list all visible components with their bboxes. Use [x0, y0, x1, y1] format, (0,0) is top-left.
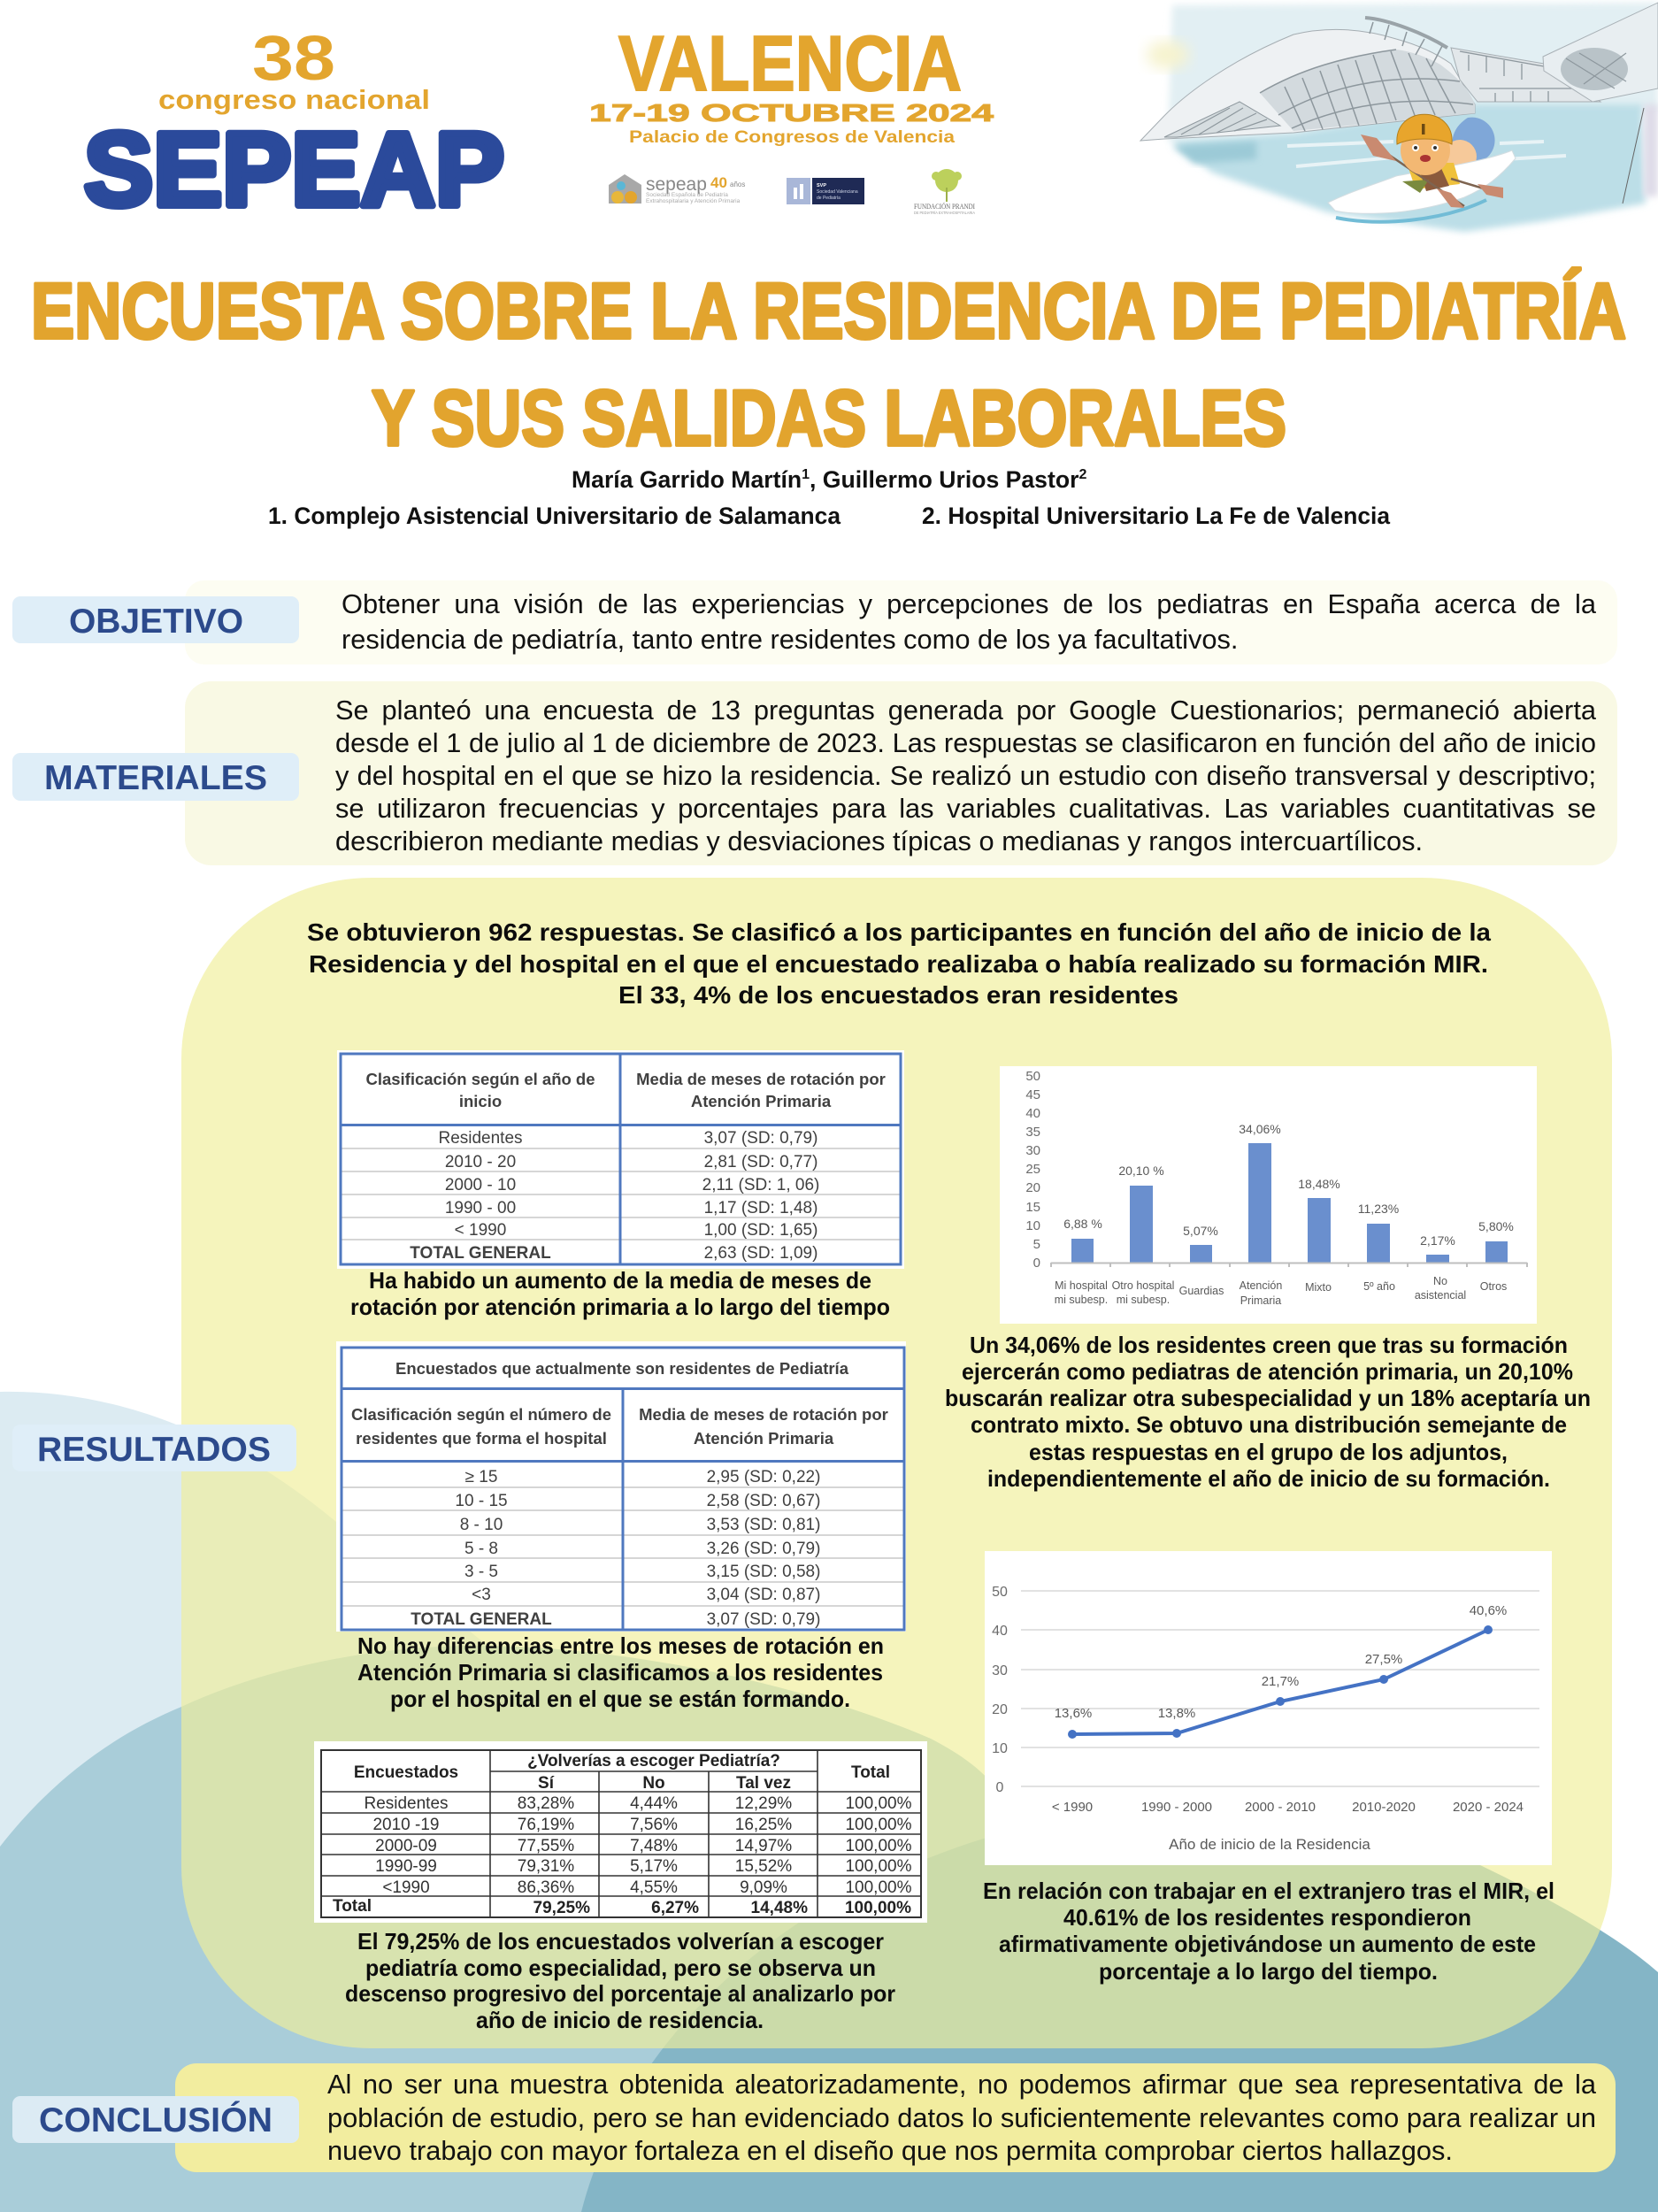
caption: bar chart: buscarán realizar otra subespecialidad y un 18% aceptaría un: [945, 1385, 1591, 1411]
caption: table 3: pediatría como especialidad, pero se observa un: [365, 1955, 876, 1981]
line chart: working abroad by start year: 2000 - 2010: [1245, 1800, 1316, 1815]
table: would choose pediatrics again: 100,00%: [845, 1857, 912, 1876]
table: would choose pediatrics again: 76,19%: [518, 1816, 574, 1834]
bar chart: career plans after residency: 10: [1025, 1218, 1040, 1233]
line chart: working abroad by start year: 40: [992, 1624, 1008, 1639]
heading: objetivo: OBJETIVO: [69, 603, 243, 641]
text: summary of responses: Se obtuvieron 962 respuestas. Se clasificó a los participantes en función del año de inicio de la: [307, 918, 1492, 946]
bar chart: career plans after residency: 18,48%: [1298, 1177, 1340, 1191]
heading: objetivo: [12, 596, 299, 643]
text: materiales: Se planteó una encuesta de 13 preguntas generada por Google Cuestionarios; permaneció abierta: [335, 695, 1596, 726]
heading: materiales: [12, 753, 299, 801]
caption: line chart: porcentaje a lo largo del tiempo.: [1099, 1958, 1438, 1985]
text: objetivo: residencia de pediatría, tanto entre residentes como de los ya facultativos.: [342, 624, 1238, 655]
affiliations: [268, 503, 1390, 529]
caption: bar chart: Un 34,06% de los residentes creen que tras su formación: [970, 1332, 1568, 1358]
caption: line chart: [983, 1878, 1554, 1985]
bar chart: career plans after residency: asistencial: [1415, 1289, 1466, 1302]
line chart: working abroad by start year: 10: [992, 1741, 1008, 1756]
table: would choose pediatrics again: 77,55%: [518, 1837, 574, 1855]
table: would choose pediatrics again: 5,17%: [630, 1857, 678, 1876]
table: rotation months by start year: 1,17 (SD: 1,48): [704, 1199, 817, 1217]
caption: table 3: descenso progresivo del porcentaje al analizarlo por: [345, 1980, 895, 2007]
line chart: working abroad by start year: 13,8%: [1158, 1706, 1195, 1721]
table: rotation months by start year: TOTAL GENERAL: [410, 1244, 551, 1263]
table: would choose pediatrics again: Total: [851, 1763, 890, 1782]
table: rotation months by hospital size: 3 - 5: [464, 1563, 498, 1581]
bar chart: career plans after residency: Otros: [1480, 1280, 1507, 1293]
caption: table 3: [345, 1928, 895, 2033]
text: conclusión: Al no ser una muestra obtenida aleatorizadamente, no podemos afirmar que sea representativa de la: [327, 2069, 1596, 2100]
caption: bar chart: contrato mixto. Se obtuvo una distribución semejante de: [971, 1411, 1567, 1438]
text: materiales: y del hospital en el que se hizo la residencia. Se realizó un estudio con diseño transversal y descriptivo;: [335, 760, 1596, 791]
background: layered blue waves: [0, 1392, 1658, 2212]
caption: table 1: rotación por atención primaria a lo largo del tiempo: [350, 1294, 890, 1320]
table: rotation months by start year: < 1990: [455, 1221, 506, 1240]
authors: María Garrido Martín: [572, 466, 802, 493]
heading: conclusión: CONCLUSIÓN: [39, 2101, 272, 2139]
table: would choose pediatrics again: 14,48%: [751, 1899, 808, 1917]
text: summary of responses: El 33, 4% de los encuestados eran residentes: [618, 981, 1178, 1009]
line chart: working abroad by start year: 40,6%: [1470, 1603, 1507, 1618]
bar chart: career plans after residency: 50: [1025, 1069, 1040, 1084]
table: rotation months by hospital size: TOTAL GENERAL: [411, 1610, 552, 1629]
panel: resultados: [12, 878, 1612, 2048]
line chart: working abroad by start year: 13,6%: [1055, 1706, 1092, 1721]
logo: SVP: Sociedad Valenciana: [817, 189, 858, 195]
line chart: working abroad by start year: 2020 - 2024: [1453, 1800, 1524, 1815]
table: rotation months by start year: Atención Primaria: [691, 1092, 832, 1110]
text: objetivo: [342, 587, 1596, 659]
table: would choose pediatrics again: Sí: [538, 1774, 555, 1793]
affiliations: 1. Complejo Asistencial Universitario de Salamanca: [268, 503, 841, 529]
table: would choose pediatrics again: 100,00%: [845, 1899, 911, 1917]
text: summary of responses: [307, 918, 1492, 1009]
table: rotation months by start year: 1990 - 00: [445, 1199, 516, 1217]
line chart: working abroad by start year: 30: [992, 1663, 1008, 1678]
bar chart: career plans after residency: 20,10 %: [1118, 1164, 1164, 1178]
line chart: working abroad by start year: 27,5%: [1365, 1652, 1402, 1667]
authors: 2: [1078, 467, 1086, 482]
table: rotation months by start year: Media de meses de rotación por: [636, 1070, 886, 1088]
table: rotation months by start year: 3,07 (SD: 0,79): [704, 1129, 817, 1148]
caption: table 2: [357, 1632, 884, 1712]
table: would choose pediatrics again: 6,27%: [651, 1899, 699, 1917]
table: would choose pediatrics again: [314, 1741, 927, 1923]
bar chart: career plans after residency: Primaria: [1240, 1294, 1281, 1307]
table: rotation months by start year: 1,00 (SD: 1,65): [704, 1221, 817, 1240]
table: would choose pediatrics again: ¿Volverías a escoger Pediatría?: [527, 1752, 780, 1770]
caption: table 2: por el hospital en el que se están formando.: [390, 1686, 850, 1712]
line chart: working abroad by start year: 1990 - 2000: [1141, 1800, 1212, 1815]
table: would choose pediatrics again: 79,31%: [518, 1857, 574, 1876]
table: would choose pediatrics again: Total: [333, 1897, 372, 1916]
line chart: working abroad by start year: 0: [996, 1780, 1004, 1795]
table: rotation months by hospital size: <3: [472, 1586, 491, 1604]
line chart: working abroad by start year: 20: [992, 1702, 1008, 1717]
illustration: kayak kids in front of Ciudad de las Artes: [1140, 3, 1658, 232]
table: rotation months by start year: 2,81 (SD: 0,77): [704, 1153, 817, 1171]
bar chart: career plans after residency: 2,17%: [1420, 1233, 1455, 1248]
caption: bar chart: [945, 1332, 1591, 1492]
bar chart: career plans after residency: 6,88 %: [1063, 1217, 1102, 1231]
table: rotation months by start year: [337, 1050, 904, 1269]
logo: sepeap 40 años: sepeap: [646, 174, 707, 195]
table: rotation months by start year: inicio: [459, 1092, 502, 1110]
logo: 38 congreso nacional SEPEAP: 38: [252, 24, 335, 94]
table: rotation months by hospital size: 3,07 (SD: 0,79): [707, 1610, 820, 1629]
table: would choose pediatrics again: 4,55%: [630, 1878, 678, 1897]
text: conclusión: nuevo trabajo con mayor fortaleza en el diseño que nos permita comprobar ciertos hallazgos.: [327, 2135, 1453, 2166]
bar chart: career plans after residency: Mixto: [1305, 1281, 1332, 1294]
bar chart: career plans after residency: Mi hospital: [1055, 1279, 1108, 1292]
table: would choose pediatrics again: Tal vez: [736, 1774, 791, 1793]
table: would choose pediatrics again: 2000-09: [375, 1837, 437, 1855]
authors: 1: [802, 467, 810, 482]
table: rotation months by hospital size: Clasificación según el número de: [351, 1405, 611, 1424]
logo: sepeap 40 años: Sociedad Española de Pediatría: [646, 192, 728, 198]
bar chart: career plans after residency: mi subesp.: [1117, 1294, 1170, 1306]
table: rotation months by start year: Residentes: [438, 1129, 523, 1148]
table: would choose pediatrics again: 7,48%: [630, 1837, 678, 1855]
logo: SVP: de Pediatría: [817, 196, 841, 201]
table: rotation months by start year: Clasificación según el año de: [365, 1070, 595, 1088]
bar chart: career plans after residency: 5: [1033, 1237, 1040, 1252]
table: rotation months by start year: 2,11 (SD: 1, 06): [702, 1176, 819, 1194]
table: rotation months by hospital size: Encuestados que actualmente son residentes de Pediatría: [395, 1359, 849, 1378]
table: would choose pediatrics again: 2010 -19: [372, 1816, 440, 1834]
table: would choose pediatrics again: 100,00%: [845, 1837, 912, 1855]
logo: 38 congreso nacional SEPEAP: SEPEAP: [84, 111, 504, 228]
bar chart: career plans after residency: 15: [1025, 1200, 1040, 1215]
table: rotation months by hospital size: 8 - 10: [460, 1516, 503, 1534]
bar chart: career plans after residency: mi subesp.: [1055, 1294, 1108, 1306]
bar chart: career plans after residency: 0: [1033, 1256, 1040, 1271]
heading: materiales: MATERIALES: [44, 759, 267, 797]
caption: table 3: El 79,25% de los encuestados volverían a escoger: [357, 1928, 884, 1955]
table: rotation months by hospital size: 3,15 (SD: 0,58): [707, 1563, 820, 1581]
table: would choose pediatrics again: 15,52%: [735, 1857, 792, 1876]
logo: sepeap 40 años: 40: [710, 174, 727, 191]
text: materiales: se utilizaron frecuencias y porcentajes para las variables cualitativas. Las variables cuantitativas se: [335, 793, 1596, 824]
bar chart: career plans after residency: 45: [1025, 1087, 1040, 1102]
panel: conclusión: [12, 2063, 1616, 2172]
bar chart: career plans after residency: 5º año: [1363, 1280, 1395, 1293]
bar chart: career plans after residency: [1000, 1066, 1537, 1324]
table: would choose pediatrics again: 79,25%: [533, 1899, 590, 1917]
caption: line chart: afirmativamente objetivándose un aumento de este: [999, 1931, 1536, 1957]
table: would choose pediatrics again: 1990-99: [375, 1857, 437, 1876]
table: rotation months by start year: 2010 - 20: [445, 1153, 516, 1171]
logo: Fundación Prandi: DE PEDIATRÍA EXTRAHOSPITALARIA: [914, 210, 975, 215]
logo: Fundación Prandi: FUNDACIÓN PRANDI: [914, 202, 975, 211]
bar chart: career plans after residency: Guardias: [1179, 1285, 1224, 1297]
title: Y SUS SALIDAS LABORALES: [372, 373, 1286, 462]
table: would choose pediatrics again: 4,44%: [630, 1794, 678, 1813]
text: objetivo: Obtener una visión de las experiencias y percepciones de los pediatras en España acerca de la: [342, 588, 1596, 619]
table: would choose pediatrics again: Encuestados: [354, 1763, 458, 1782]
table: rotation months by hospital size: 10 - 15: [455, 1492, 508, 1510]
table: rotation months by hospital size: residentes que forma el hospital: [356, 1429, 607, 1448]
caption: table 2: Atención Primaria si clasificamos a los residentes: [357, 1659, 883, 1686]
table: would choose pediatrics again: 9,09%: [740, 1878, 787, 1897]
text: summary of responses: Residencia y del hospital en el que el encuestado realizaba o había realizado su formación MIR.: [309, 950, 1488, 978]
title: [31, 266, 1626, 462]
bar chart: career plans after residency: 5,07%: [1183, 1224, 1218, 1238]
bar chart: career plans after residency: Otro hospital: [1112, 1279, 1174, 1292]
caption: bar chart: independientemente el año de inicio de su formación.: [987, 1465, 1550, 1492]
logo: SVP: [787, 178, 864, 204]
table: rotation months by hospital size: 2,95 (SD: 0,22): [707, 1468, 820, 1486]
caption: table 3: año de inicio de residencia.: [476, 2007, 764, 2033]
logo: sepeap 40 años: años: [730, 180, 745, 188]
line chart: working abroad by start year: 50: [992, 1585, 1008, 1600]
table: rotation months by start year: 2000 - 10: [445, 1176, 516, 1194]
bar chart: career plans after residency: 35: [1025, 1125, 1040, 1140]
table: would choose pediatrics again: 16,25%: [735, 1816, 792, 1834]
heading: resultados: [12, 1425, 296, 1471]
bar chart: career plans after residency: Atención: [1240, 1279, 1282, 1292]
line chart: working abroad by start year: Año de inicio de la Residencia: [1169, 1836, 1370, 1853]
bar chart: career plans after residency: 11,23%: [1358, 1202, 1399, 1216]
table: rotation months by hospital size: 3,04 (SD: 0,87): [707, 1586, 820, 1604]
logo: 38 congreso nacional SEPEAP: congreso nacional: [158, 84, 430, 115]
caption: line chart: 40.61% de los residentes respondieron: [1063, 1904, 1471, 1931]
caption: table 2: No hay diferencias entre los meses de rotación en: [357, 1632, 884, 1659]
table: rotation months by hospital size: 5 - 8: [464, 1540, 498, 1558]
line chart: working abroad by start year: 2010-2020: [1352, 1800, 1416, 1815]
table: would choose pediatrics again: No: [642, 1774, 665, 1793]
bar chart: career plans after residency: 25: [1025, 1162, 1040, 1177]
bar chart: career plans after residency: 34,06%: [1239, 1122, 1281, 1136]
table: rotation months by hospital size: ≥ 15: [465, 1468, 497, 1486]
table: would choose pediatrics again: 14,97%: [735, 1837, 792, 1855]
logo: SVP: SVP: [817, 183, 826, 188]
bar chart: career plans after residency: 30: [1025, 1143, 1040, 1158]
table: rotation months by hospital size: Media de meses de rotación por: [639, 1405, 888, 1424]
text: materiales: describieron mediante medias y desviaciones típicas o medianas y rangos intercuartílicos.: [335, 826, 1423, 856]
logo: Fundación Prandi: [914, 169, 975, 215]
table: rotation months by hospital size: 3,53 (SD: 0,81): [707, 1516, 820, 1534]
heading: resultados: RESULTADOS: [37, 1431, 271, 1469]
bar chart: career plans after residency: 5,80%: [1478, 1219, 1514, 1233]
logo: sepeap 40 años: [609, 174, 745, 204]
table: would choose pediatrics again: 100,00%: [845, 1794, 912, 1813]
table: rotation months by hospital size: 3,26 (SD: 0,79): [707, 1540, 820, 1558]
table: rotation months by hospital size: Atención Primaria: [694, 1429, 834, 1448]
table: would choose pediatrics again: <1990: [382, 1878, 430, 1897]
heading: conclusión: [12, 2096, 299, 2143]
table: rotation months by hospital size: 2,58 (SD: 0,67): [707, 1492, 820, 1510]
table: would choose pediatrics again: Residentes: [364, 1794, 449, 1813]
table: would choose pediatrics again: 86,36%: [518, 1878, 574, 1897]
caption: bar chart: estas respuestas en el grupo de los adjuntos,: [1029, 1439, 1508, 1465]
table: would choose pediatrics again: 83,28%: [518, 1794, 574, 1813]
line chart: working abroad by start year: 21,7%: [1262, 1674, 1299, 1689]
text: materiales: desde el 1 de julio al 1 de diciembre de 2023. Las respuestas se clasificaron en función del año de inicio: [335, 727, 1596, 758]
logo: sepeap 40 años: Extrahospitalaria y Atención Primaria: [646, 198, 741, 204]
line chart: working abroad by start year: [985, 1551, 1552, 1865]
bar chart: career plans after residency: 40: [1025, 1106, 1040, 1121]
table: would choose pediatrics again: 100,00%: [845, 1816, 912, 1834]
table: would choose pediatrics again: 7,56%: [630, 1816, 678, 1834]
congress venue and dates: [589, 19, 994, 147]
line chart: working abroad by start year: < 1990: [1052, 1800, 1093, 1815]
table: rotation months by start year: 2,63 (SD: 1,09): [704, 1244, 817, 1263]
caption: line chart: En relación con trabajar en el extranjero tras el MIR, el: [983, 1878, 1554, 1904]
table: would choose pediatrics again: 12,29%: [735, 1794, 792, 1813]
caption: bar chart: ejercerán como pediatras de atención primaria, un 20,10%: [962, 1358, 1573, 1385]
text: conclusión: población de estudio, pero se han evidenciado datos lo suficientemente relevantes como para realizar un: [327, 2102, 1596, 2132]
bar chart: career plans after residency: No: [1433, 1275, 1447, 1287]
logo: 38 congreso nacional SEPEAP: [84, 24, 504, 228]
congress venue and dates: Palacio de Congresos de Valencia: [629, 128, 956, 147]
text: materiales: [335, 694, 1596, 862]
table: would choose pediatrics again: 100,00%: [845, 1878, 912, 1897]
caption: table 1: [350, 1267, 890, 1320]
caption: table 1: Ha habido un aumento de la media de meses de: [369, 1267, 871, 1294]
authors: , Guillermo Urios Pastor: [810, 466, 1078, 493]
congress venue and dates: VALENCIA: [618, 19, 962, 107]
text: conclusión: [327, 2068, 1596, 2170]
table: rotation months by hospital size: [336, 1341, 906, 1632]
panel: materiales: [12, 681, 1617, 865]
affiliations: 2. Hospital Universitario La Fe de Valencia: [922, 503, 1390, 529]
bar chart: career plans after residency: 20: [1025, 1180, 1040, 1195]
panel: objetivo: [12, 580, 1617, 664]
congress venue and dates: 17-19 OCTUBRE 2024: [589, 99, 994, 127]
